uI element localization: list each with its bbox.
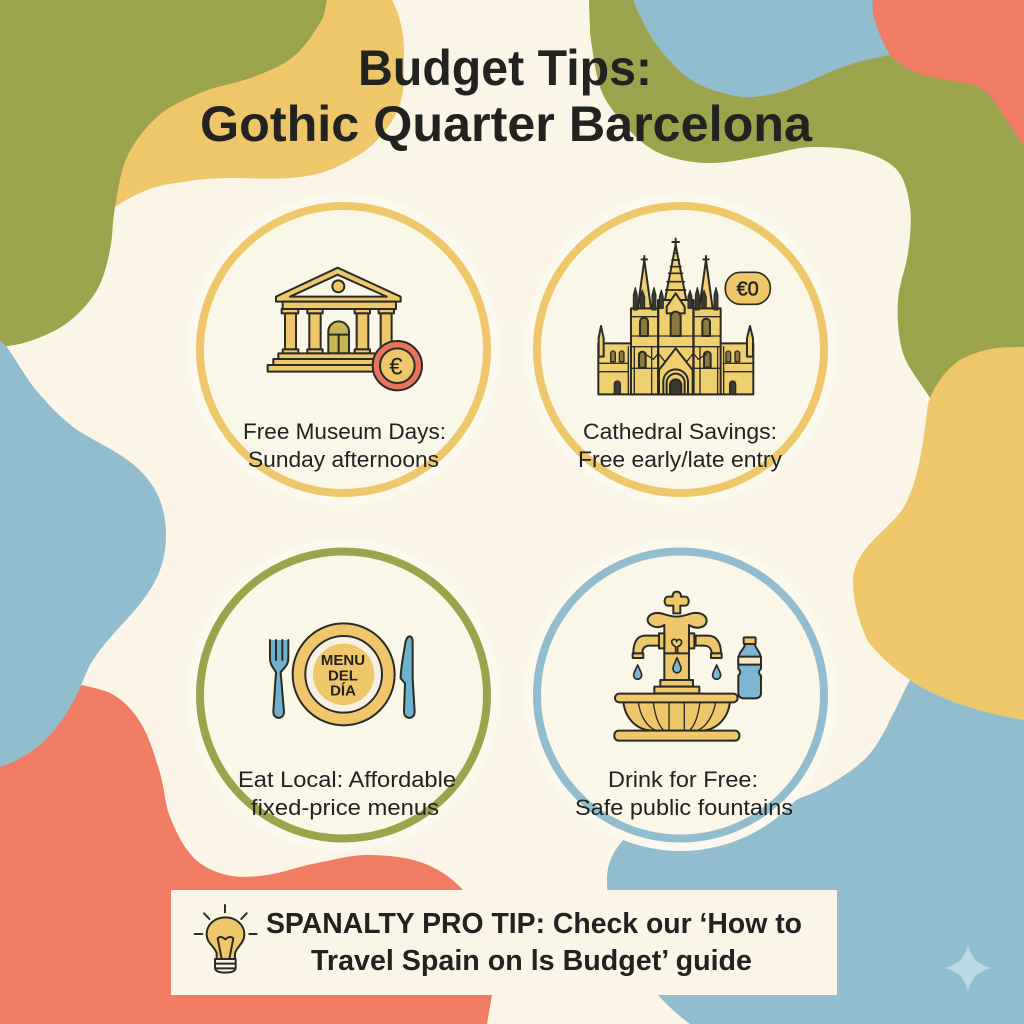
label: eat local: fixed-price menus <box>251 795 439 820</box>
label: eat local <box>238 767 456 820</box>
label: cathedral savings: Free early/late entry <box>578 447 783 472</box>
label: free museum days: Free Museum Days: <box>243 419 446 444</box>
label: drink for free: Drink for Free: <box>608 767 758 792</box>
label: cathedral savings: Cathedral Savings: <box>583 419 777 444</box>
title: Budget Tips: <box>358 40 652 96</box>
icon: lightbulb <box>195 905 257 973</box>
icon: plate with fork and knife: MENU <box>321 652 365 669</box>
text: pro tip: SPANALTY PRO TIP: Check our ‘How to <box>266 908 802 940</box>
icon: sparkle <box>944 944 992 992</box>
icon: museum with euro coin <box>268 268 422 390</box>
badge: zero euros: €0 <box>737 279 759 301</box>
panel: eat local <box>188 539 500 851</box>
icon: museum with euro coin: € <box>389 354 403 381</box>
label: drink for free: Safe public fountains <box>575 795 793 820</box>
label: drink for free <box>575 767 793 820</box>
title <box>200 40 813 152</box>
panel: cathedral savings <box>524 194 836 506</box>
text: pro tip: Travel Spain on ls Budget’ guide <box>311 945 752 977</box>
icon: gothic cathedral <box>598 239 770 394</box>
label: free museum days: Sunday afternoons <box>248 447 439 472</box>
label: eat local: Eat Local: Affordable <box>238 767 456 792</box>
icon: plate with fork and knife <box>270 623 415 725</box>
panel: drink for free <box>524 539 836 851</box>
icon: plate with fork and knife: DEL <box>328 667 358 684</box>
label: cathedral savings <box>578 419 783 472</box>
panel: free museum days <box>188 194 500 506</box>
label: free museum days <box>243 419 446 472</box>
title: Gothic Quarter Barcelona <box>200 96 813 152</box>
text: pro tip <box>266 908 802 977</box>
badge: zero euros <box>725 272 770 304</box>
icon: plate with fork and knife: DÍA <box>330 682 356 699</box>
callout: pro tip <box>171 890 837 995</box>
icon: public fountain and water bottle <box>614 592 761 741</box>
